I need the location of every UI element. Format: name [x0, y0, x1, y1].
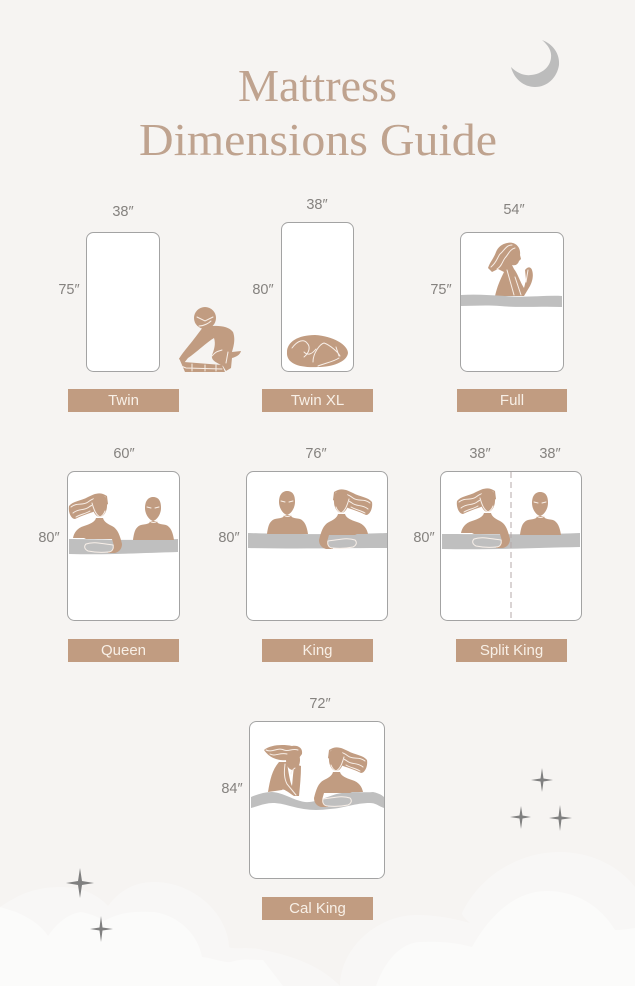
panel: cal king [221, 696, 384, 920]
blanket: full [461, 295, 562, 307]
panel: queen [38, 446, 180, 662]
panel: full: Full [500, 392, 524, 409]
panel: split king: 38″ [539, 446, 561, 462]
panel: twin: 75″ [58, 282, 80, 298]
panel: twin: Twin [108, 392, 139, 409]
title: Mattress [238, 60, 397, 111]
woman and man: queen [69, 493, 174, 553]
clouds right [340, 852, 635, 986]
panel: split king: Split King [480, 642, 543, 659]
panel: cal king: Cal King [289, 900, 346, 917]
panel: split king: 38″ [469, 446, 491, 462]
man and woman: king [267, 489, 372, 549]
blanket: split king [442, 533, 580, 549]
blanket: queen [69, 539, 178, 554]
clouds left [0, 882, 340, 986]
panel: split king [413, 446, 582, 662]
panel: split king: 80″ [413, 530, 435, 546]
woman resting head on hand: cal king [264, 745, 302, 796]
woman sitting [488, 243, 533, 296]
panel: twin xl: Twin XL [291, 392, 344, 409]
panel: king: 76″ [305, 446, 327, 462]
panel: king: King [302, 642, 333, 659]
title [139, 60, 497, 165]
panel: twin xl: 38″ [306, 197, 328, 213]
panel: full: 75″ [430, 282, 452, 298]
panel: twin xl: 80″ [252, 282, 274, 298]
panel: cal king: 72″ [309, 696, 331, 712]
icon: sleeping dog [287, 335, 348, 367]
panel: queen: Queen [101, 642, 146, 659]
panel: king: 80″ [218, 530, 240, 546]
icon: child playing with train [179, 307, 241, 372]
panel: full [430, 202, 567, 412]
panel: full: 54″ [503, 202, 525, 218]
panel: twin: 38″ [112, 204, 134, 220]
woman with arm over blanket: cal king [314, 747, 367, 807]
panel: queen: 80″ [38, 530, 60, 546]
panel: twin xl [252, 197, 373, 412]
icon: crescent moon [511, 40, 559, 87]
title: Dimensions Guide [139, 114, 497, 165]
panel: king [218, 446, 388, 662]
panel: queen: 60″ [113, 446, 135, 462]
icon: stars [66, 768, 572, 942]
blanket: king [248, 533, 387, 548]
panel: cal king: 84″ [221, 781, 243, 797]
blanket: cal king [251, 792, 384, 810]
panel: twin [58, 204, 179, 412]
woman and man: split king [457, 488, 561, 548]
